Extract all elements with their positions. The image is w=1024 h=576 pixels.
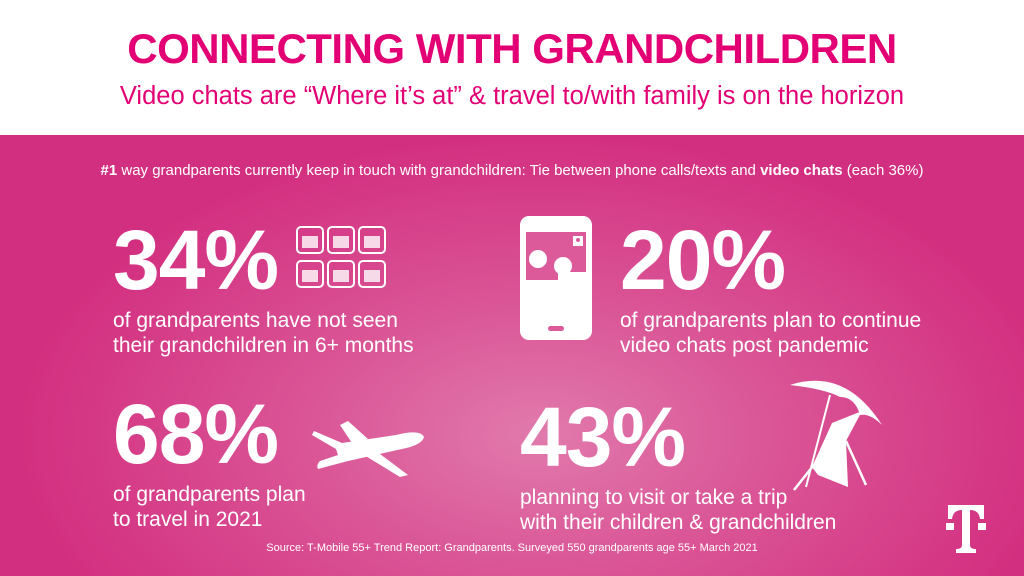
stat: 68% (113, 387, 306, 531)
icon: calendars (296, 226, 386, 288)
stat: 43% (520, 390, 836, 534)
headline stat line: #1 way grandparents currently keep in touch with grandchildren: Tie between phone calls/texts and video chats (each 36%) (100, 162, 923, 179)
logo: T (946, 505, 986, 553)
text: video chats post pandemic (620, 334, 869, 357)
stat: 20%: of grandparents plan to continue (620, 309, 921, 332)
stat: 20%: 20% (620, 213, 785, 307)
stat: 68%: of grandparents plan (113, 483, 306, 506)
background panel (0, 135, 1024, 576)
text: with their children & grandchildren (520, 511, 836, 534)
stat: 34% (113, 213, 414, 357)
stat: 43%: 43% (520, 390, 685, 484)
source: Source: T-Mobile 55+ Trend Report: Grandparents. Surveyed 550 grandparents age 55+ March 2021 (266, 542, 758, 554)
stat: 20% (620, 213, 921, 357)
stat: 34%: 34% (113, 213, 278, 307)
icon: phone video chat (520, 216, 592, 340)
stat: 43%: planning to visit or take a trip (520, 486, 787, 509)
text: to travel in 2021 (113, 508, 262, 531)
icon: beach umbrella and chair (790, 380, 882, 491)
text: their grandchildren in 6+ months (113, 334, 414, 357)
stat: 68%: 68% (113, 387, 278, 481)
icon: airplane (312, 421, 424, 477)
stat: 34%: of grandparents have not seen (113, 309, 398, 332)
title: CONNECTING WITH GRANDCHILDREN (127, 25, 897, 72)
subtitle: Video chats are “Where it’s at” & travel to/with family is on the horizon (120, 82, 904, 110)
